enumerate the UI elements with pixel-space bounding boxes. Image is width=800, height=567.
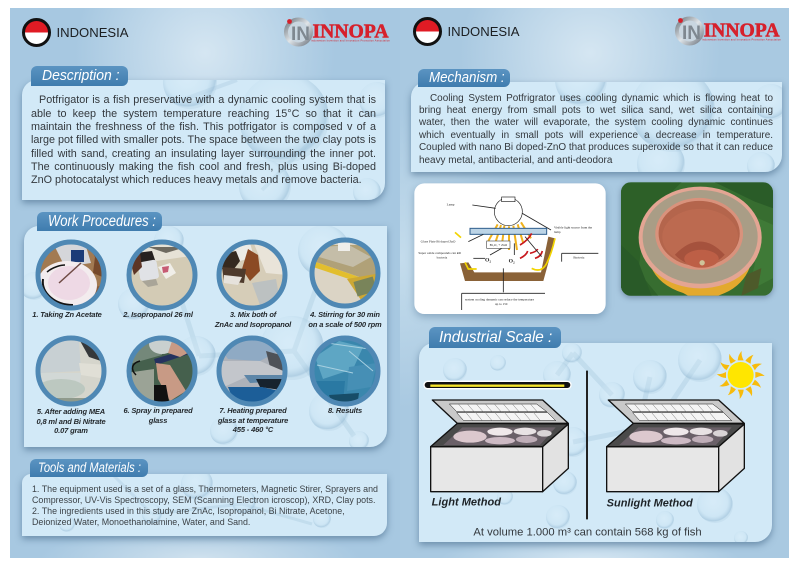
mechanism card: [411, 82, 782, 172]
left header: Indonesia flag: [22, 18, 51, 47]
panel: description: [18, 66, 389, 207]
freezer: light method: [431, 400, 568, 492]
oxygen labels: O₂: [509, 259, 515, 265]
light rays: [488, 222, 531, 250]
tools and materials text: 1. The equipment used is a set of a glass, Thermometers, Magnetic Stirer, Sprayers and: [32, 484, 378, 494]
photo: isopropanol: [126, 240, 198, 310]
caption 4: on a scale of 500 rpm: [308, 320, 382, 329]
capacity note: At volume 1.000 m³ can contain 568 kg of fish: [473, 527, 702, 539]
step 2: [123, 240, 198, 319]
caption 5: [36, 407, 106, 435]
label: light method: Light Method: [432, 497, 502, 509]
diagram labels: lamp: [554, 230, 561, 234]
diagram labels: Glass Plate Bi doped ZnO: [421, 240, 456, 244]
diagram labels: [418, 203, 593, 306]
work procedures heading: Work Procedures :: [48, 213, 156, 230]
panel: mechanism: [407, 69, 786, 179]
left header: country name: INDONESIA: [56, 25, 129, 40]
caption 4: 4. Stirring for 30 min: [310, 310, 380, 319]
left header: INNOPA logo: INNOPA: [312, 20, 389, 42]
right header: INNOPA logo: IN: [682, 23, 701, 44]
work procedures card: [24, 226, 387, 447]
pot cross-section: [460, 237, 555, 281]
photo: mix ZnAc and isopropanol: [216, 240, 288, 310]
caption 6: 6. Spray in prepared: [123, 406, 193, 415]
right page background: [400, 8, 789, 558]
freezer: sunlight method: [607, 400, 744, 492]
tools and materials text: [32, 484, 378, 527]
step 7: [216, 336, 288, 434]
industrial scale heading: [429, 327, 561, 348]
photo: taking Zn acetate: [36, 240, 106, 310]
yellow and red reaction lines: [455, 232, 555, 270]
description text: Potfrigator is a fish preservative with a dynamic cooling system that is: [39, 94, 376, 106]
description card: [22, 80, 385, 200]
lamp: [494, 197, 522, 226]
divider line: [584, 371, 590, 519]
caption 5: 5. After adding MEA: [37, 407, 105, 416]
caption 7: glass at temperature: [218, 416, 288, 425]
right header: INNOPA logo: [675, 16, 782, 46]
description text: [31, 94, 376, 186]
industrial scale heading: Industrial Scale :: [439, 329, 552, 346]
right header: country name: INDONESIA: [448, 24, 520, 39]
photo: results: [310, 336, 380, 406]
description heading: [31, 66, 128, 86]
mechanism text: Coupled with nano Bi doped-ZnO that produces superoxide so that it can reduce: [419, 142, 773, 153]
icon: sun: [717, 351, 765, 399]
caption 7: 455 - 460 °C: [233, 425, 273, 434]
oxygen labels: O₂: [485, 257, 491, 263]
mechanism text: bring heat energy from small pots to wet silica sand, wet silica containing: [419, 105, 773, 116]
caption 6: glass: [149, 416, 167, 425]
catalyst box: Bi₂O₃ + ZnO: [490, 243, 508, 247]
mechanism heading: Mechanism :: [429, 70, 505, 86]
diagram background: [414, 183, 606, 314]
caption 8: 8. Results: [328, 406, 362, 415]
step 6: [123, 336, 198, 425]
caption 5: 0,8 ml and Bi Nitrate: [37, 417, 105, 426]
panel: industrial scale: [415, 327, 776, 549]
oxygen labels: [485, 257, 515, 265]
photo: adding MEA: [36, 336, 106, 406]
panel: work procedures: [20, 212, 391, 454]
description text: large pot filled with smaller pots. The space between the two clay pots is: [31, 134, 376, 146]
diagram labels: bacteria: [437, 255, 448, 259]
industrial scale card: [419, 343, 772, 542]
caption 7: [218, 406, 288, 434]
diagram labels: Visible light source from the: [554, 225, 593, 229]
panel: tools and materials: [18, 459, 391, 543]
mechanism text: heavy metal, antibacterial, and anti-deodora: [419, 155, 612, 166]
description text: maintain the freshness of the fish. This potfrigator is composed v of a: [31, 121, 376, 133]
description text: filled with sand, creating an insulating layer surrounding the inner pot.: [31, 148, 376, 160]
photo: stirring on scale: [310, 238, 380, 308]
diagram labels: up to 15C: [495, 302, 509, 306]
mechanism text: [419, 93, 773, 166]
right header: INNOPA logo: INNOPA: [704, 20, 780, 42]
glass plate: [470, 228, 547, 234]
right header: Indonesia flag: [413, 17, 442, 46]
left header: INNOPA logo: [284, 18, 391, 46]
diagram labels: Lamp: [447, 203, 455, 207]
description heading: Description :: [42, 67, 120, 84]
caption 3: ZnAc and Isopropanol: [215, 320, 291, 329]
tools and materials text: Compressor, UV-Vis Spectroscopy, SEM (Scanning Electron icroscop), XRD, Clay pots.: [32, 495, 375, 505]
description text: able to keep the system temperature reaching 15°C so that it can: [31, 108, 376, 120]
catalyst box: [487, 241, 510, 248]
caption 2: 2. Isopropanol 26 ml: [123, 310, 193, 319]
tools and materials card: [22, 474, 387, 536]
caption 1: 1. Taking Zn Acetate: [32, 310, 102, 319]
industrial scale illustration: [423, 351, 764, 539]
photo: spray on glass: [126, 336, 198, 406]
mechanism text: water, then the water will evaporate, the system cooling dynamic continues: [419, 117, 773, 128]
caption 3: 3. Mix both of: [230, 310, 276, 319]
description text: The continuously making the fish cool and fresh, plus using Bi-doped: [31, 161, 376, 173]
mechanism text: which eventually in small pots will experience a decrease in temperature.: [419, 130, 773, 141]
tools and materials heading: Tools and Materials :: [38, 460, 141, 475]
step 1: [32, 240, 106, 319]
tools and materials text: Deionized Water, Monoethanolamine, Water, and Sand.: [32, 517, 250, 527]
photo: heating glass: [216, 336, 288, 406]
caption 7: 7. Heating prepared: [219, 406, 287, 415]
description text: ZnO photocatalyst which reduces heavy metals and remove bacteria.: [31, 174, 362, 186]
left page background: [10, 8, 400, 558]
left header: INNOPA logo: IN: [291, 24, 310, 45]
label: sunlight method: Sunlight Method: [607, 497, 694, 509]
photo: clay pot with sand: [618, 182, 776, 301]
caption 3: [214, 310, 292, 329]
right header: INNOPA logo: Indonesian Invention and Innovation Promotion Association: [702, 38, 782, 42]
mechanism diagram: [410, 182, 609, 320]
step 8: [310, 336, 380, 415]
caption 6: [123, 406, 193, 425]
left header: INNOPA logo: Indonesian Invention and Innovation Promotion Association: [311, 38, 391, 42]
mechanism text: Cooling System Potfrigrator uses cooling dynamic which is flowing heat to: [430, 93, 773, 104]
tools and materials text: 2. The ingredients used in this study are ZnAc, Isopropanol, Bi Nitrate, Acetone,: [32, 506, 345, 516]
caption 5: 0.07 gram: [54, 426, 88, 435]
caption 4: [308, 310, 382, 329]
step 3: [214, 240, 292, 329]
lamp bar: [428, 372, 567, 399]
diagram labels: Bacteria: [573, 255, 585, 259]
diagram labels: Super oxide compounds can kill: [418, 251, 461, 255]
diagram labels: system cooling dynamic can reduce the temperature: [465, 297, 535, 301]
diagram arrows: [462, 205, 598, 310]
step 5: [36, 336, 106, 435]
step 4: [308, 238, 382, 329]
